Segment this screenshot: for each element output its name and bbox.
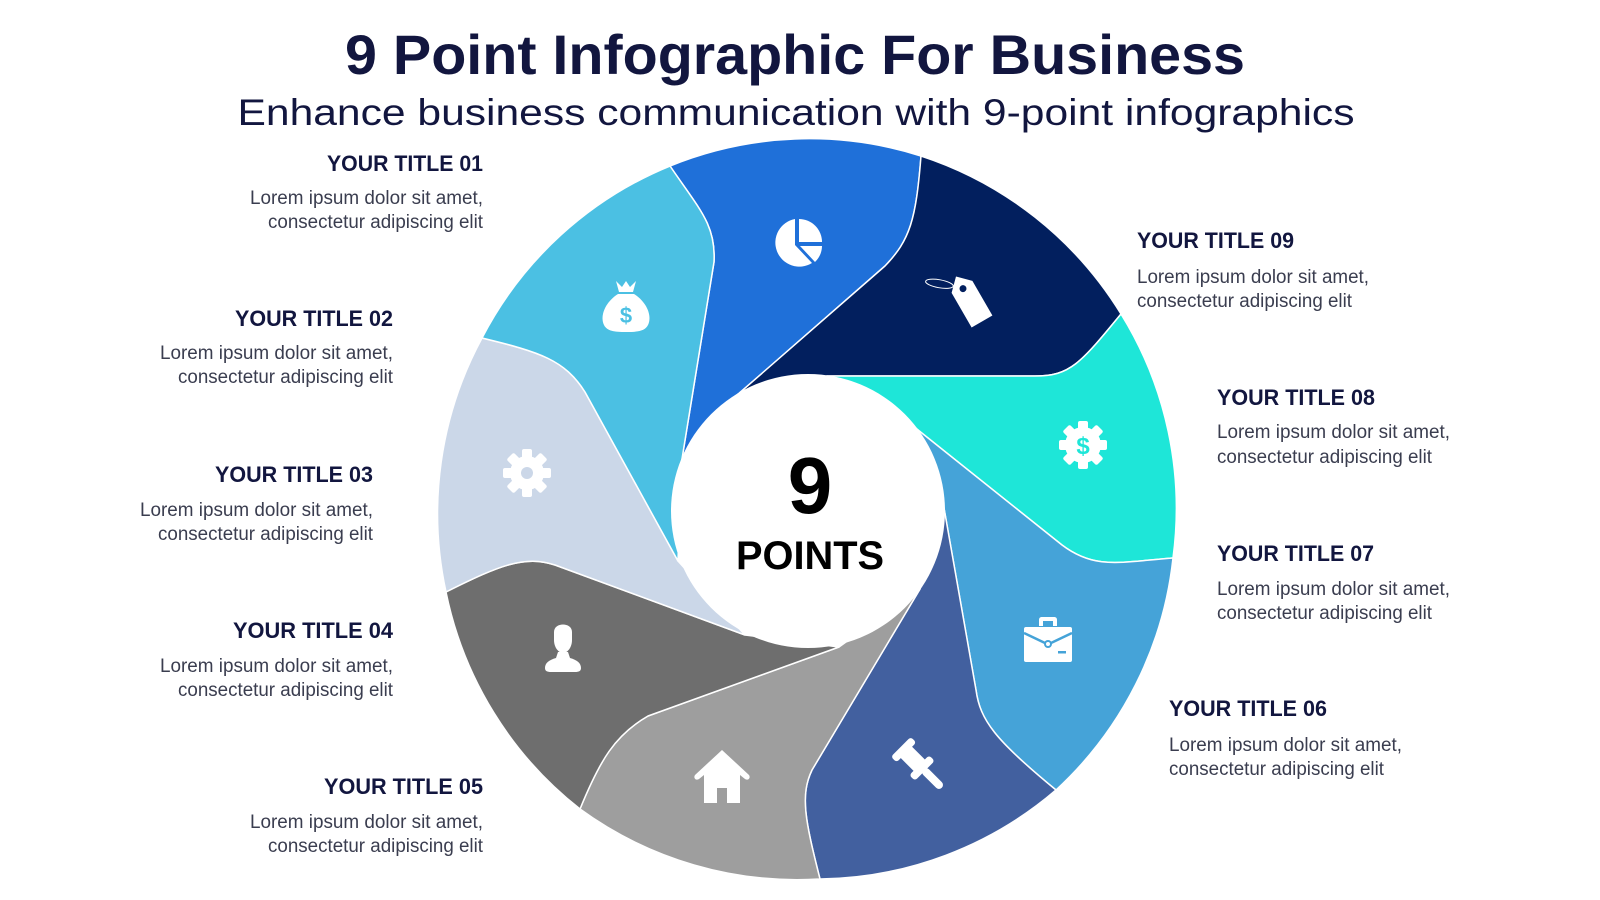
segment: steel blue — [805, 508, 1056, 879]
segment: dark gray — [446, 561, 839, 809]
text block: title 05 — [250, 774, 484, 857]
text block: title 02: Lorem ipsum dolor sit amet, — [160, 343, 393, 364]
text block: title 04: consectetur adipiscing elit — [178, 680, 394, 701]
icon: money bag: $ — [620, 303, 632, 328]
text block: title 03 — [140, 462, 374, 545]
text block: title 07: YOUR TITLE 07 — [1217, 541, 1374, 566]
text block: title 01 — [250, 151, 484, 233]
text block: title 03: consectetur adipiscing elit — [158, 524, 374, 545]
text block: title 06: consectetur adipiscing elit — [1169, 759, 1385, 780]
center circle — [671, 374, 945, 648]
text block: title 06: YOUR TITLE 06 — [1169, 696, 1327, 721]
text block: title 06: Lorem ipsum dolor sit amet, — [1169, 735, 1402, 756]
text block: title 01: Lorem ipsum dolor sit amet, — [250, 188, 483, 209]
pie chart: 9 swirl segments — [438, 139, 1176, 880]
text block: title 07: Lorem ipsum dolor sit amet, — [1217, 579, 1450, 600]
text block: title 08: YOUR TITLE 08 — [1217, 385, 1375, 410]
text block: title 08 — [1217, 385, 1450, 468]
text block: title 06 — [1169, 696, 1402, 780]
text block: title 03: Lorem ipsum dolor sit amet, — [140, 500, 373, 521]
text block: title 09: Lorem ipsum dolor sit amet, — [1137, 267, 1369, 288]
text block: title 08: Lorem ipsum dolor sit amet, — [1217, 422, 1450, 443]
icon: house — [694, 750, 750, 803]
segment: pie chart blue — [670, 139, 921, 465]
text block: title 09 — [1137, 228, 1369, 312]
text block: title 07 — [1217, 541, 1450, 624]
text block: title 09: YOUR TITLE 09 — [1137, 228, 1294, 253]
icon: gavel — [891, 737, 952, 798]
center number: 9 — [788, 441, 832, 530]
segment: teal — [827, 314, 1176, 562]
icon: person — [545, 624, 581, 672]
title: 9 Point Infographic For Business — [345, 23, 1245, 86]
text block: title 01: YOUR TITLE 01 — [327, 151, 483, 176]
subtitle: Enhance business communication with 9-point infographics — [238, 92, 1354, 133]
text block: title 09: consectetur adipiscing elit — [1137, 291, 1353, 312]
icon: pie chart — [775, 219, 822, 267]
text block: title 08: consectetur adipiscing elit — [1217, 447, 1433, 468]
text block: title 03: YOUR TITLE 03 — [215, 462, 373, 487]
icon: gear — [493, 439, 561, 507]
text block: title 01: consectetur adipiscing elit — [268, 212, 484, 233]
text block: title 05: YOUR TITLE 05 — [324, 774, 483, 799]
segment: light slate — [438, 338, 745, 635]
text block: title 02 — [160, 306, 394, 388]
text block: title 02: YOUR TITLE 02 — [235, 306, 393, 331]
icon: gear with dollar: $ — [1076, 433, 1090, 460]
center label: POINTS — [736, 534, 884, 578]
segment: light blue — [482, 166, 714, 561]
text block: title 04 — [160, 618, 394, 701]
icon: money bag — [603, 281, 649, 332]
text block: title 02: consectetur adipiscing elit — [178, 367, 394, 388]
text block: title 07: consectetur adipiscing elit — [1217, 603, 1433, 624]
text block: title 05: consectetur adipiscing elit — [268, 836, 484, 857]
icon: briefcase — [1024, 617, 1072, 662]
icon: price tag — [922, 258, 992, 337]
text block: title 04: YOUR TITLE 04 — [233, 618, 394, 643]
text block: title 05: Lorem ipsum dolor sit amet, — [250, 812, 483, 833]
segment: mid blue — [908, 422, 1173, 790]
segment: light gray — [580, 589, 920, 880]
icon: gear with dollar — [1049, 411, 1117, 479]
segment: navy — [736, 156, 1121, 396]
text block: title 04: Lorem ipsum dolor sit amet, — [160, 656, 393, 677]
